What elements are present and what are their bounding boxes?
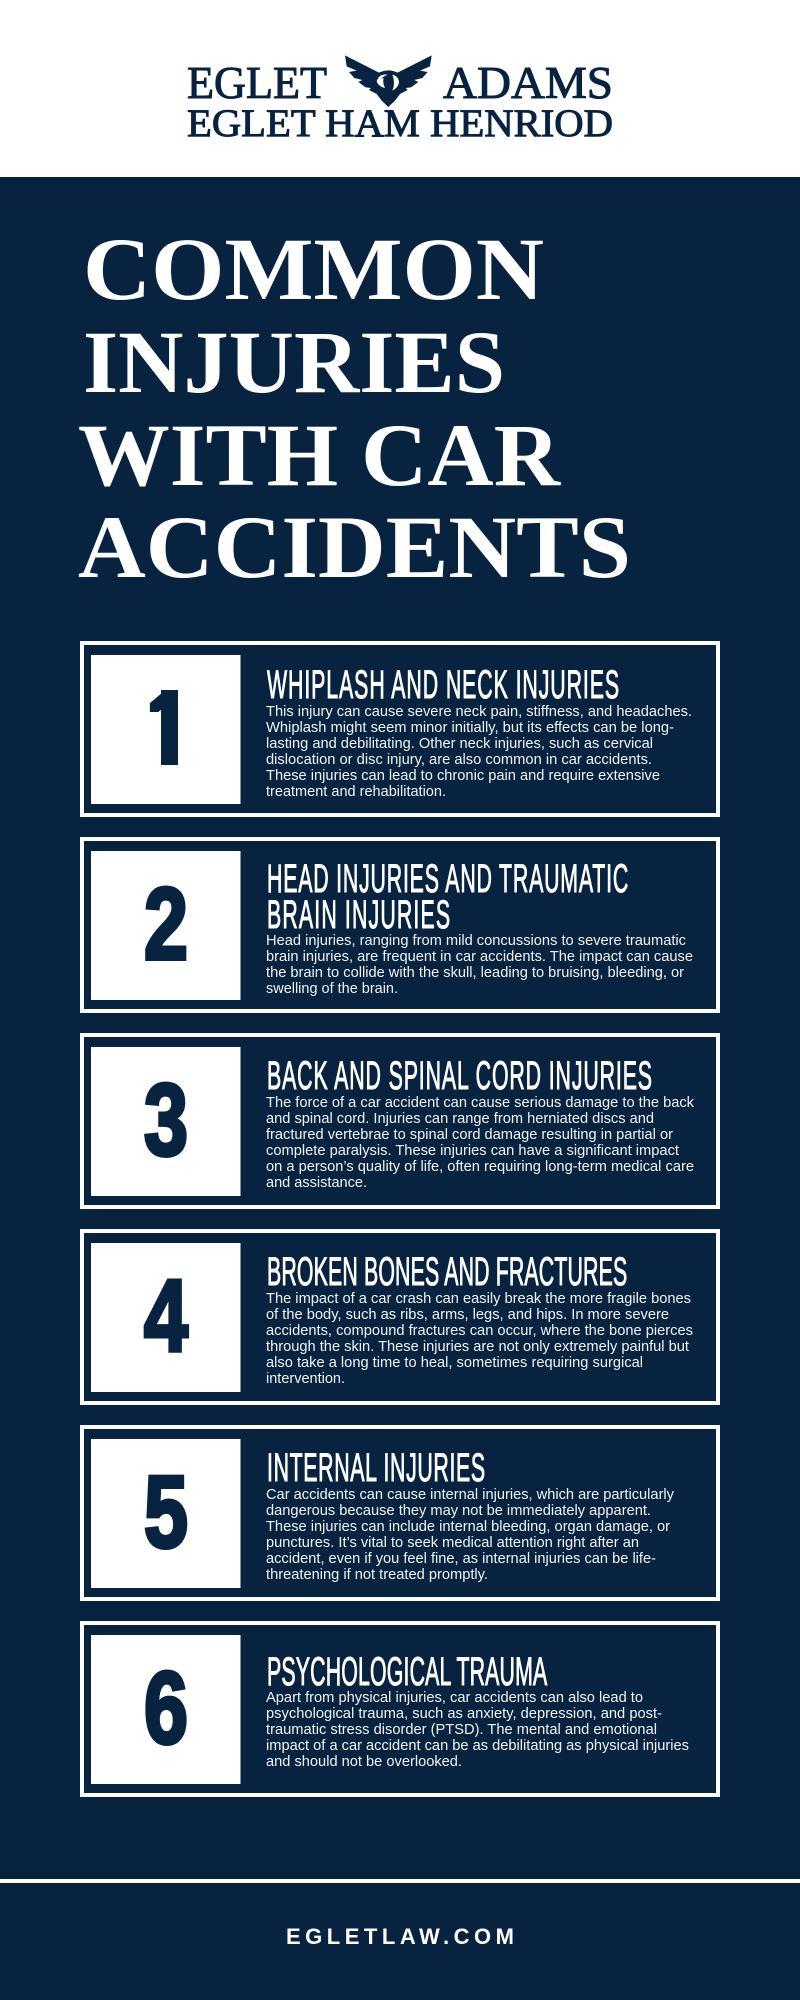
icon: eagle: [345, 55, 432, 107]
body text 2: [266, 932, 693, 997]
body text 1: treatment and rehabilitation.: [266, 783, 446, 800]
body text 5: Car accidents can cause internal injuries, which are particularly: [266, 1486, 674, 1503]
body text 5: [266, 1486, 674, 1583]
panel: internal injuries: [82, 1427, 718, 1599]
body text 3: on a person’s quality of life, often requiring long-term medical care: [266, 1158, 694, 1175]
heading 2: BRAIN INJURIES: [267, 892, 450, 937]
body text 6: psychological trauma, such as anxiety, depression, and post-: [266, 1705, 662, 1722]
number 2: 2: [144, 867, 188, 981]
body text 1: Whiplash might seem minor initially, but its effects can be long-: [266, 719, 674, 736]
body text 6: impact of a car accident can be as debilitating as physical injuries: [266, 1737, 689, 1754]
heading 1: WHIPLASH AND NECK INJURIES: [267, 662, 619, 707]
body text 3: The force of a car accident can cause serious damage to the back: [266, 1094, 694, 1111]
title: WITH CAR: [78, 407, 562, 505]
logo: wordmark line 1 right: ADAMS: [443, 58, 613, 108]
body text 1: lasting and debilitating. Other neck injuries, such as cervical: [266, 735, 653, 752]
body text 4: of the body, such as ribs, arms, legs, and hips. In more severe: [266, 1306, 669, 1323]
body text 1: dislocation or disc injury, are also common in car accidents.: [266, 751, 652, 768]
body text 6: and should not be overlooked.: [266, 1753, 462, 1770]
body text 2: brain injuries, are frequent in car accidents. The impact can cause: [266, 948, 693, 965]
body text 3: and assistance.: [266, 1174, 367, 1191]
body text 1: [266, 703, 692, 800]
number box 2: [91, 851, 240, 1000]
logo: wordmark line 2: EGLET HAM HENRIOD: [187, 102, 613, 145]
body text 1: These injuries can lead to chronic pain and require extensive: [266, 767, 660, 784]
heading 6: PSYCHOLOGICAL TRAUMA: [267, 1649, 548, 1694]
body text 6: Apart from physical injuries, car accidents can also lead to: [266, 1689, 643, 1706]
panel: broken bones and fractures: [82, 1231, 718, 1403]
number 6: 6: [144, 1651, 188, 1765]
body text 5: threatening if not treated promptly.: [266, 1566, 488, 1583]
body text 2: Head injuries, ranging from mild concussions to severe traumatic: [266, 932, 686, 949]
panel: psychological trauma: [82, 1623, 718, 1795]
title: COMMON: [83, 221, 544, 319]
panel: head injuries and traumatic brain injuries: [82, 839, 718, 1011]
heading 3: BACK AND SPINAL CORD INJURIES: [267, 1053, 652, 1098]
number box 5: [91, 1439, 240, 1588]
body text 1: This injury can cause severe neck pain, stiffness, and headaches.: [266, 703, 692, 720]
number 5: 5: [144, 1455, 188, 1569]
number box 4: [91, 1243, 240, 1392]
body text 4: also take a long time to heal, sometimes requiring surgical: [266, 1354, 643, 1371]
number 1: 1: [146, 671, 190, 785]
body text 5: dangerous because they may not be immediately apparent.: [266, 1502, 651, 1519]
number 4: 4: [144, 1259, 188, 1373]
header: logo band: [0, 0, 800, 177]
footer: [0, 1879, 800, 1949]
number box 6: [91, 1635, 240, 1784]
number 3: 3: [144, 1063, 188, 1177]
number box 3: [91, 1047, 240, 1196]
body text 6: [266, 1689, 689, 1770]
title: [78, 221, 631, 597]
logo: wordmark line 1 left: EGLET: [187, 58, 327, 108]
body text 3: and spinal cord. Injuries can range from herniated discs and: [266, 1110, 654, 1127]
body text 2: the brain to collide with the skull, leading to bruising, bleeding, or: [266, 964, 684, 981]
body text 4: [266, 1290, 693, 1387]
heading 4: BROKEN BONES AND FRACTURES: [267, 1249, 627, 1294]
heading 5: INTERNAL INJURIES: [267, 1445, 485, 1490]
body text 5: punctures. It’s vital to seek medical attention right after an: [266, 1534, 639, 1551]
body text 3: fractured vertebrae to spinal cord damage resulting in partial or: [266, 1126, 673, 1143]
title: INJURIES: [83, 314, 505, 412]
heading 2: HEAD INJURIES AND TRAUMATIC: [267, 856, 628, 901]
body text 3: [266, 1094, 694, 1191]
body text 5: accident, even if you feel fine, as internal injuries can be life-: [266, 1550, 656, 1567]
body text 5: These injuries can include internal bleeding, organ damage, or: [266, 1518, 670, 1535]
panel: back and spinal cord injuries: [82, 1035, 718, 1207]
number box 1: [91, 655, 240, 804]
body text 4: accidents, compound fractures can occur, where the bone pierces: [266, 1322, 693, 1339]
body text 6: traumatic stress disorder (PTSD). The mental and emotional: [266, 1721, 657, 1738]
body text 3: complete paralysis. These injuries can have a significant impact: [266, 1142, 680, 1159]
body text 4: intervention.: [266, 1370, 345, 1387]
panel: whiplash and neck injuries: [82, 643, 718, 815]
body text 2: swelling of the brain.: [266, 980, 398, 997]
heading 2: [267, 856, 628, 937]
body text 4: through the skin. These injuries are not only extremely painful but: [266, 1338, 690, 1355]
footer url: EGLETLAW.COM: [286, 1924, 514, 1949]
title: ACCIDENTS: [78, 499, 631, 597]
body text 4: The impact of a car crash can easily break the more fragile bones: [266, 1290, 691, 1307]
